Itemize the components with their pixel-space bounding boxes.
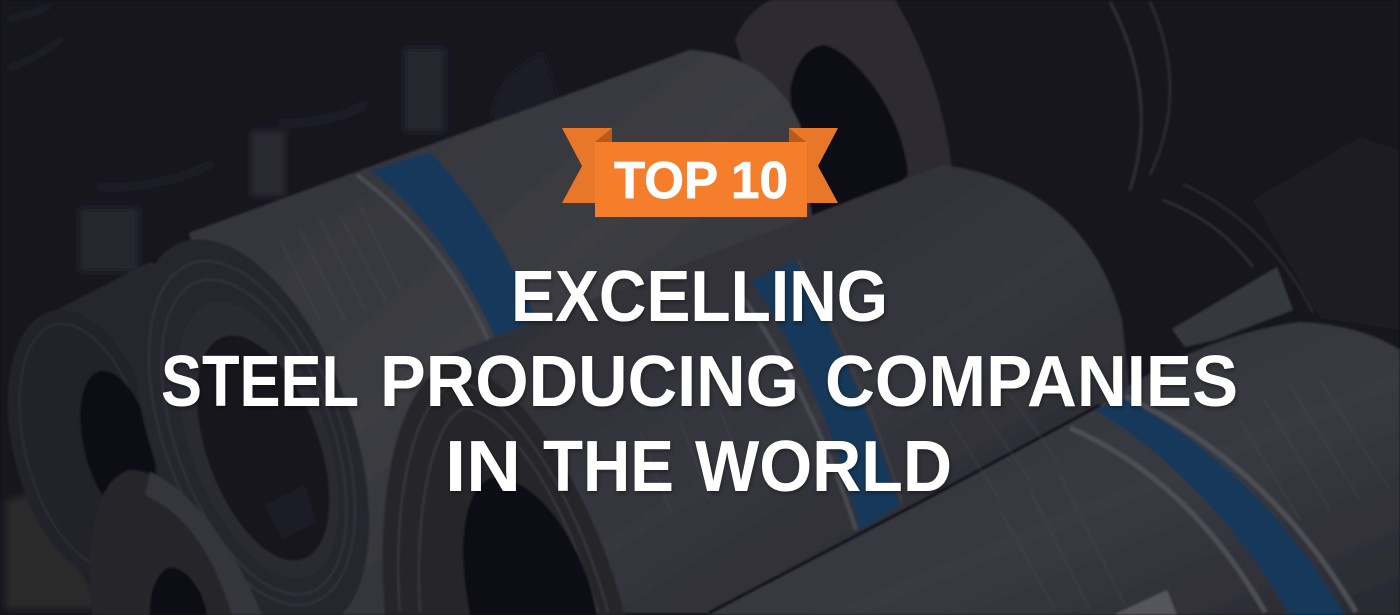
left coil: [0, 262, 250, 613]
title line 2: STEEL: [161, 342, 359, 422]
title line 3: THE: [543, 427, 674, 507]
coil B: [383, 165, 1135, 615]
streak texture: [280, 205, 1390, 610]
ribbon right tail: [789, 128, 838, 203]
coil C: [709, 322, 1400, 615]
title line 3: IN: [445, 427, 521, 507]
coil A face: [135, 239, 369, 615]
blue band B: [752, 260, 900, 530]
title line 1: EXCELLING: [511, 257, 888, 337]
ribbon main panel: [595, 142, 807, 217]
blue band C: [1095, 398, 1345, 615]
title line 2: [161, 342, 1238, 422]
title: [161, 257, 1238, 507]
badge text: [614, 152, 788, 210]
title line 2: PRODUCING: [380, 342, 799, 422]
badge text: 10: [731, 152, 788, 210]
ribbon left tail: [562, 128, 612, 203]
title line 3: [445, 427, 952, 507]
back left machinery: [5, 5, 560, 610]
badge text: TOP: [614, 152, 718, 210]
ribbon badge: TOP 10: [562, 128, 838, 217]
title line 2: COMPANIES: [825, 342, 1238, 422]
blue band A: [371, 152, 545, 350]
main coil A: [108, 50, 900, 615]
title line 3: WORLD: [695, 427, 952, 507]
coil B face: [383, 362, 625, 615]
back coil ring: [735, 0, 1170, 240]
small bottom-left coil: [90, 470, 262, 615]
back right coils: [1095, 137, 1398, 347]
